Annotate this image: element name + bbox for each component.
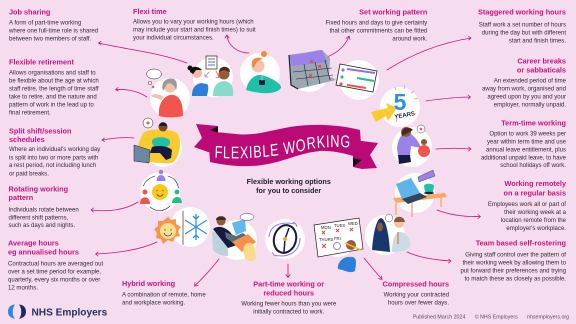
text: working remotely: employer's workplace. — [506, 226, 566, 232]
text: split shift: or paid breaks. — [9, 171, 49, 177]
text: career breaks — [482, 56, 567, 109]
text: working remotely — [488, 179, 567, 232]
text: set working pattern: Set working pattern — [359, 8, 427, 17]
icon: two colleagues — [365, 214, 410, 255]
icon: schedule board: THURS — [319, 237, 334, 242]
icon: sun and snowflake — [154, 207, 210, 247]
text: working remotely: Working remotely — [504, 179, 567, 188]
logo: NHS Employers: NHS Employers — [32, 307, 108, 318]
text: team based self-rostering — [460, 238, 567, 282]
text: staggered working hours: start and finish times. — [509, 39, 566, 45]
text: average hours: eg annualised hours — [8, 247, 79, 256]
banner — [194, 124, 378, 169]
icon: schedule board: TUES — [334, 223, 345, 228]
text: job sharing: where one full-time role is shared — [8, 29, 98, 35]
icon: retirement woman — [146, 69, 190, 118]
text: rotating working pattern: Rotating working — [8, 184, 68, 193]
text: term-time working: school holidays off work. — [500, 163, 566, 169]
text: hybrid working: and workplace working. — [122, 300, 186, 306]
text: flexi time: Flexi time — [133, 7, 167, 16]
text: split shift: schedules — [9, 135, 45, 144]
text: split shift — [9, 126, 101, 177]
text: working remotely: on a regular basis — [504, 188, 566, 197]
text: set working pattern: around work. — [392, 36, 428, 42]
text: rotating working pattern: Individuals rotate between — [8, 207, 79, 213]
text: career breaks: employer, normally unpaid. — [494, 103, 566, 109]
text: job sharing: Job sharing — [9, 8, 50, 17]
icon: schedule board: MON — [321, 225, 331, 230]
text: term-time working: Term-time working — [501, 118, 566, 127]
text: hybrid working — [122, 279, 206, 306]
footer: © NHS Employers — [475, 313, 518, 320]
thought bubble — [146, 69, 162, 88]
text: term-time working — [481, 118, 567, 169]
banner left tail — [194, 124, 218, 152]
icon: schedule board — [314, 218, 363, 272]
footer: Published March 2024 — [413, 314, 465, 320]
text: staggered working hours: during the day but with different — [482, 31, 566, 37]
text: team based self-rostering: to match these as closely as possible. — [464, 276, 566, 282]
text: rotating working pattern — [8, 184, 79, 229]
text: career breaks: Career breaks — [517, 56, 566, 65]
icon: calendar — [289, 50, 336, 92]
banner title: FLEXIBLE WORKING — [216, 135, 350, 158]
text: career breaks: agreed upon by you and your — [487, 95, 566, 101]
text: flexi time: may include your start and finish times) to suit — [133, 28, 256, 34]
text: compressed hours: Working your contracted — [384, 292, 449, 298]
text: flexible retirement: Flexible retirement — [9, 58, 74, 66]
text: job sharing: A form of part-time working — [9, 21, 81, 27]
text: flexible retirement: staff retire, the length of time staff — [9, 87, 99, 93]
text: average hours: Contractual hours are averaged out — [8, 261, 103, 267]
text: part-time working: reduced hours — [263, 288, 314, 297]
text: working remotely: location remote from the — [501, 218, 567, 224]
text: term-time working: Option to work 39 weeks per — [489, 131, 566, 137]
text: rotating working pattern: such as days and nights. — [8, 223, 75, 229]
text: staggered working hours: Staff work a set number of hours — [479, 23, 566, 29]
footer — [413, 313, 569, 320]
text: job sharing: between two members of staff. — [9, 37, 92, 43]
text: team based self-rostering: Team based self-rostering — [476, 238, 566, 247]
icon: schedule board: WED — [348, 221, 358, 226]
banner right tail — [353, 140, 378, 169]
footer: nhsemployers.org — [527, 314, 569, 320]
icon: split shift person on sofa — [134, 118, 182, 167]
text: career breaks: or sabbaticals — [517, 65, 566, 74]
text: staggered working hours: Staggered working hours — [478, 8, 566, 17]
text: average hours: quarterly, every six months or over — [8, 277, 100, 283]
banner main ribbon — [208, 125, 362, 166]
text: rotating working pattern: pattern — [8, 193, 33, 202]
subtitle — [247, 177, 331, 195]
icon: five years: 5 — [394, 89, 407, 115]
icon: desk with laptop — [393, 170, 447, 217]
icon: rotating pattern — [140, 170, 182, 212]
subtitle: Flexible working options — [247, 177, 331, 186]
icon: mentor and child — [392, 125, 432, 167]
text: flexible retirement: pattern of work in the lead up to — [9, 102, 94, 108]
text: term-time working: annual leave entitlement, plus — [486, 147, 566, 153]
text: compressed hours — [382, 279, 449, 306]
text: flexi time — [133, 7, 256, 42]
text: career breaks: An extended period of time — [494, 79, 567, 85]
icon: gantt chart — [336, 60, 379, 100]
icon: job sharing people — [188, 56, 233, 97]
icon: five years: YEARS — [394, 111, 416, 121]
logo: NHS Employers — [8, 304, 108, 319]
text: job sharing — [8, 8, 98, 43]
text: working remotely: their working week at a — [504, 210, 567, 216]
icon: flexi time woman — [240, 51, 281, 93]
text: term-time working: year within term time and use — [487, 139, 567, 145]
text: rotating working pattern: different shift patterns, — [8, 215, 69, 221]
text: compressed hours: Compressed hours — [382, 279, 449, 288]
text: average hours: 12 months. — [8, 285, 38, 291]
icon: five years — [371, 85, 420, 127]
icon: hybrid working — [212, 214, 257, 261]
text: hybrid working: Hybrid working — [122, 279, 175, 288]
text: staggered working hours — [478, 8, 566, 45]
subtitle: for you to consider — [256, 186, 321, 195]
text: team based self-rostering: put forward their preferences and trying — [460, 268, 566, 274]
text: term-time working: additional unpaid leave, to have — [481, 155, 567, 161]
text: set working pattern: that other commitments can be fitted — [329, 29, 427, 35]
text: career breaks: away from work, organised and — [482, 87, 566, 93]
text: flexible retirement: be flexible about the age at which — [9, 79, 99, 85]
text: set working pattern — [325, 8, 428, 42]
arrows — [91, 35, 480, 286]
text: team based self-rostering: their working week by allowing them to — [462, 260, 567, 266]
text: part-time working: Working fewer hours than you were — [241, 301, 337, 307]
text: part-time working: Part-time working or — [253, 279, 324, 288]
text: split shift: a rest period, not including lunch — [9, 163, 96, 169]
text: working remotely: Employees work all or part of — [488, 202, 566, 208]
text: split shift: Split shift/session — [9, 126, 71, 135]
text: average hours: over a set time period for example, — [8, 269, 101, 275]
text: flexi time: Allows you to vary your working hours (which — [133, 20, 254, 26]
icon: schedule board: FRI — [334, 236, 341, 241]
text: average hours — [8, 238, 103, 291]
text: average hours: Average hours — [8, 238, 59, 247]
text: split shift: is split into two or more parts with — [9, 155, 98, 161]
text: split shift: Where an individual's working day — [9, 147, 101, 153]
text: part-time working: initially contracted to work. — [253, 309, 324, 315]
text: flexible retirement — [9, 58, 99, 116]
text: flexible retirement: Allows organisations and staff to — [9, 71, 96, 77]
text: part-time working — [241, 279, 337, 315]
text: flexi time: your individual circumstances. — [133, 36, 214, 42]
text: flexible retirement: take to retire, and the nature and — [9, 94, 97, 100]
text: hybrid working: A combination of remote, home — [122, 292, 206, 298]
icon: clock — [265, 219, 305, 259]
text: team based self-rostering: Giving staff control over the pattern of — [465, 252, 566, 258]
text: compressed hours: hours over fewer days. — [388, 300, 449, 306]
text: flexible retirement: final retirement. — [9, 110, 51, 116]
text: set working pattern: Fixed hours and days to give certainty — [325, 21, 428, 27]
